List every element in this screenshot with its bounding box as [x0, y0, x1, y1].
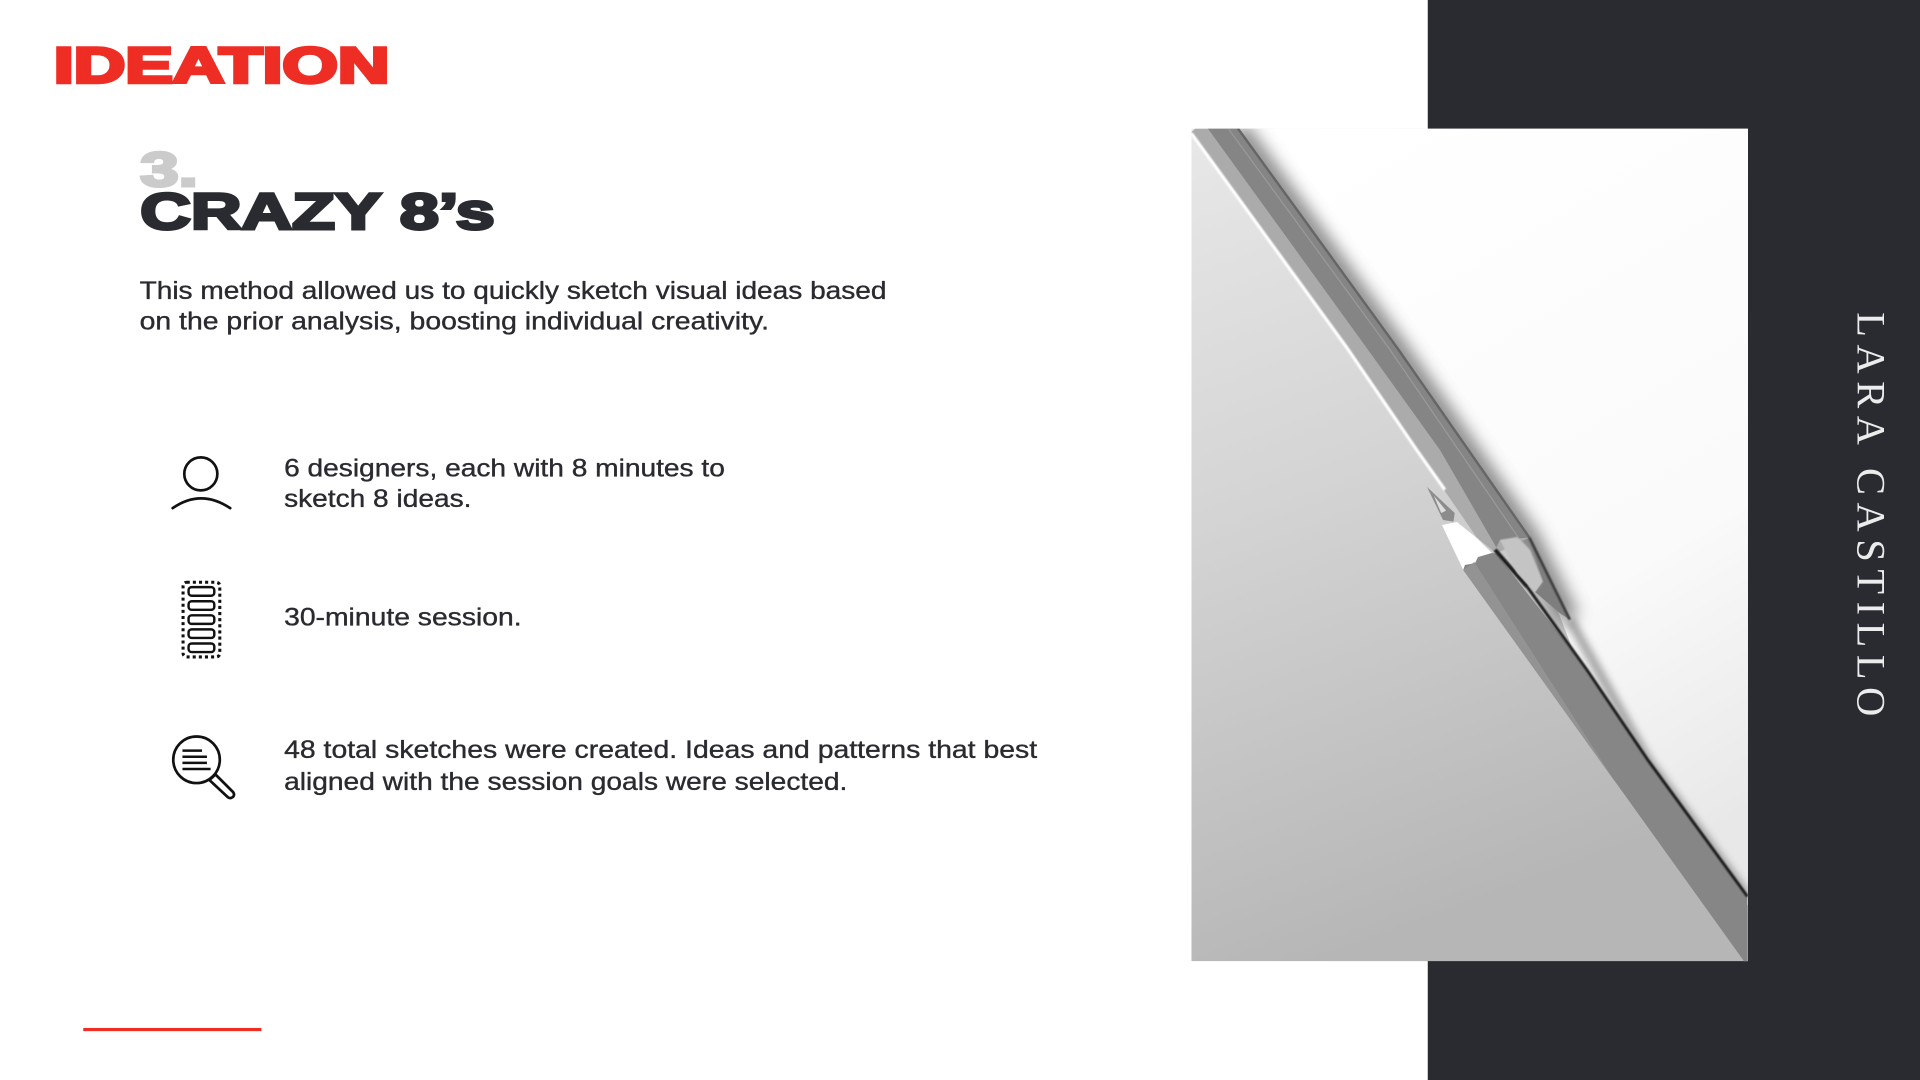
item text: results: aligned with the session goals were selected.: [284, 768, 847, 796]
dark pencil edge: [1495, 550, 1747, 896]
section number: 3.: [140, 143, 198, 197]
item text: results: [284, 736, 1037, 796]
photo background: bright paper: [1224, 129, 1749, 906]
section heading: CRAZY 8’s: [140, 183, 495, 240]
pencil wood cone: [1442, 522, 1492, 570]
icon: magnifier with lines: [173, 737, 234, 798]
icon: person: [173, 457, 230, 508]
intro text: [140, 277, 887, 335]
item text: designers: [284, 454, 725, 513]
title: IDEATION: IDEATION: [54, 38, 389, 94]
photo: pencil on paper: [1191, 129, 1749, 962]
item text: session length: 30-minute session.: [284, 604, 522, 632]
highlight edge: [1191, 133, 1445, 490]
item text: results: 48 total sketches were created. Ideas and patterns that best: [284, 736, 1037, 764]
item text: designers: sketch 8 ideas.: [284, 485, 471, 513]
pencil upper body: [1208, 129, 1529, 547]
pencil edge lines: [1228, 129, 1529, 538]
item text: designers: 6 designers, each with 8 minutes to: [284, 454, 725, 482]
pencil lead tip: [1427, 487, 1455, 522]
side name: LARA CASTILLO: [1849, 312, 1894, 716]
intro text: on the prior analysis, boosting individual creativity.: [140, 307, 769, 335]
pencil flap highlight: [1500, 537, 1543, 592]
red accent line: [83, 1028, 261, 1031]
pencil lower shade: [1463, 562, 1616, 784]
pencil flap: [1529, 538, 1570, 620]
photo background: shaded paper: [1191, 129, 1749, 961]
dark side panel: [1428, 0, 1920, 1080]
icon: session timeline: [183, 582, 220, 657]
pencil lower body: [1463, 553, 1747, 962]
pencil light band: [1191, 129, 1529, 553]
intro text: This method allowed us to quickly sketch visual ideas based: [140, 277, 887, 305]
pencil shadow: [1238, 129, 1747, 896]
